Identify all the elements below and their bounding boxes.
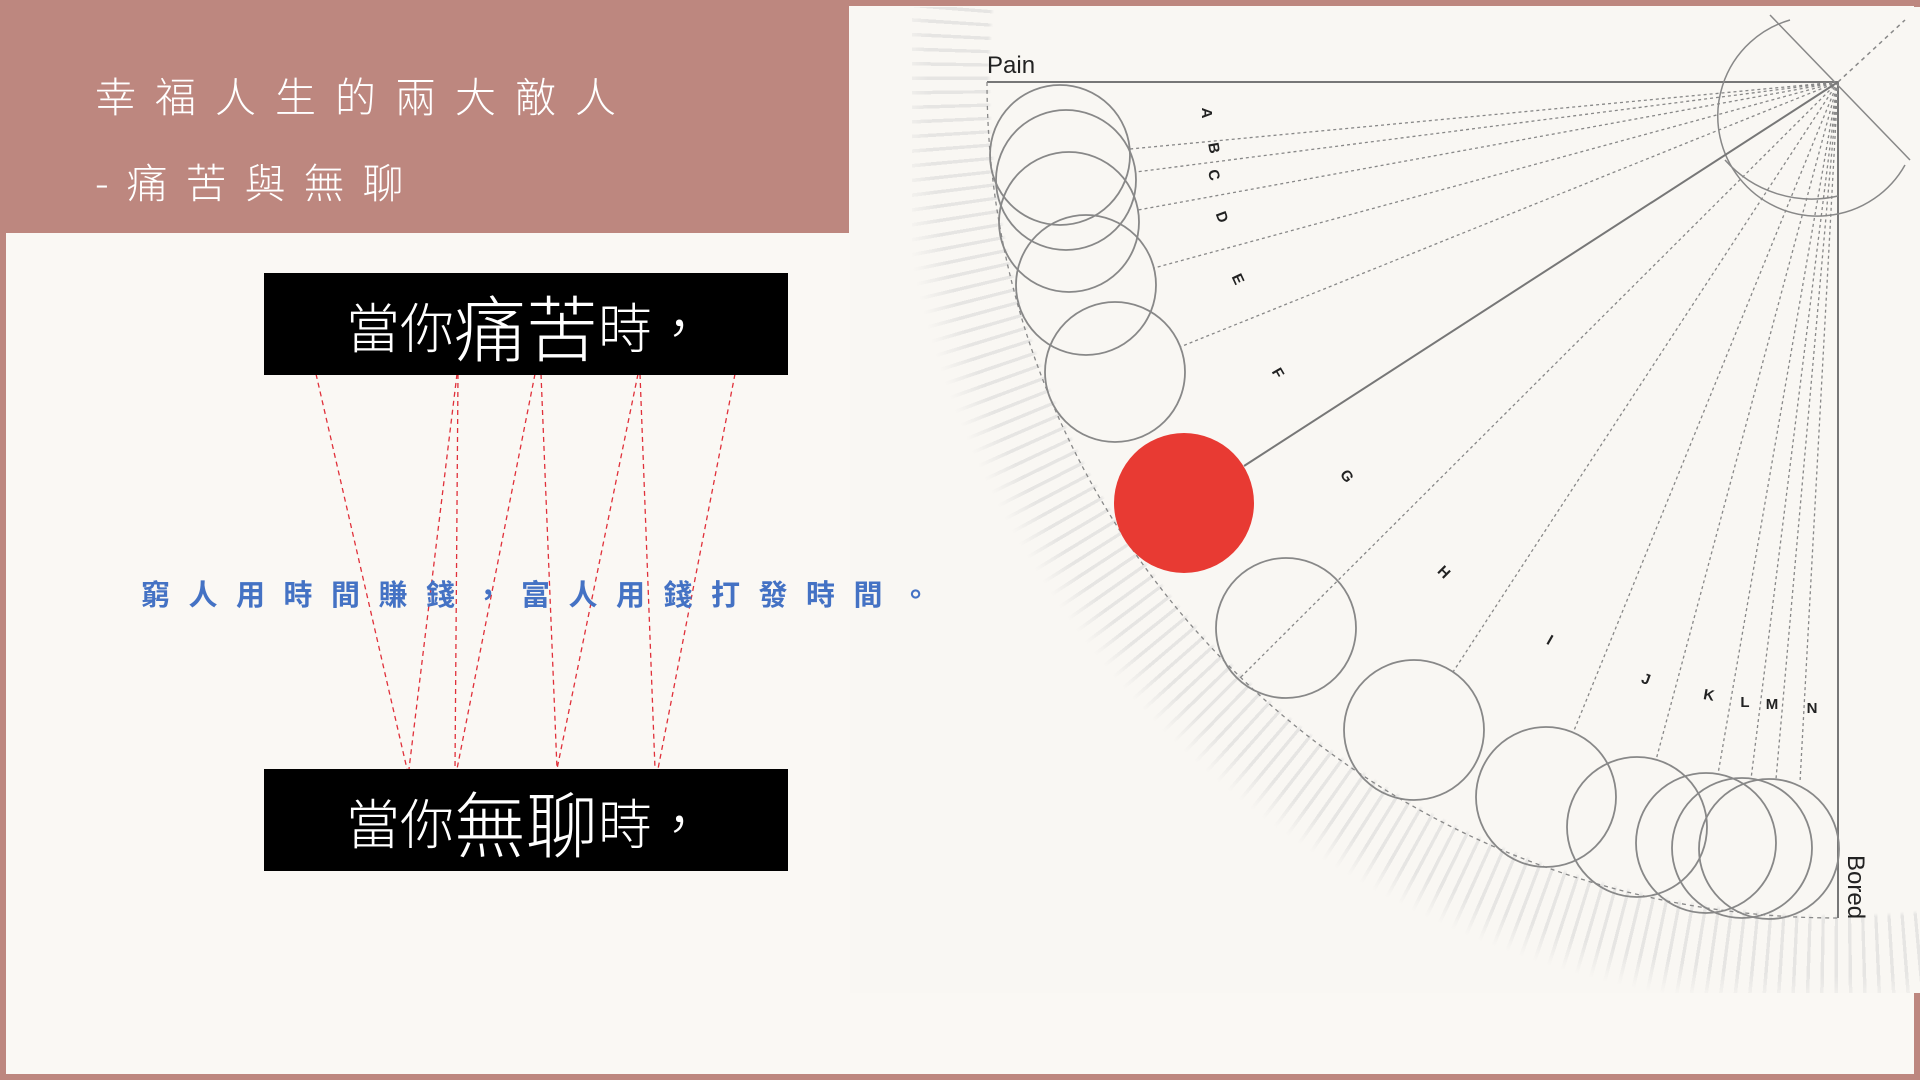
letter labels: K	[1702, 686, 1716, 705]
box: when bored: 時，	[598, 780, 706, 860]
title line 2: -痛苦與無聊	[95, 150, 422, 210]
letter labels: B	[1204, 141, 1223, 155]
letter labels: G	[1336, 467, 1357, 486]
letter labels: C	[1204, 168, 1223, 183]
box: when in pain: 時，	[598, 284, 706, 364]
box: when bored: 當你	[346, 780, 454, 860]
right image: pain-bored diagram background	[850, 7, 1920, 993]
solid ray to red ball	[1244, 82, 1838, 466]
title panel	[0, 0, 849, 233]
label: Pain: Pain	[987, 52, 1035, 79]
circles	[990, 85, 1839, 919]
blue quote text: 窮人用時間賺錢，富人用錢打發時間。	[141, 572, 949, 614]
title line 1: 幸福人生的兩大敵人	[95, 64, 635, 124]
label: Bored: Bored	[1842, 855, 1869, 919]
box: when in pain	[264, 273, 788, 375]
apex arcs	[1718, 15, 1910, 216]
box: when bored: 無聊	[454, 768, 598, 872]
dashed arc	[987, 82, 1838, 918]
letter labels: A	[1198, 108, 1215, 119]
red ball	[1114, 433, 1254, 573]
box: when bored	[264, 769, 788, 871]
box: when in pain: 痛苦	[454, 272, 598, 376]
letter labels: L	[1740, 694, 1750, 711]
letter labels: E	[1228, 271, 1247, 287]
box: when in pain: 當你	[346, 284, 454, 364]
axes	[987, 82, 1838, 918]
letter labels: N	[1807, 700, 1817, 717]
letter labels: F	[1268, 365, 1287, 381]
letter labels	[1198, 108, 1817, 717]
dashed rays	[1130, 82, 1838, 782]
letter labels: D	[1212, 209, 1231, 225]
letter labels: I	[1544, 632, 1556, 649]
letter labels: M	[1766, 696, 1778, 713]
letter labels: J	[1639, 670, 1653, 689]
letter labels: H	[1434, 563, 1453, 582]
